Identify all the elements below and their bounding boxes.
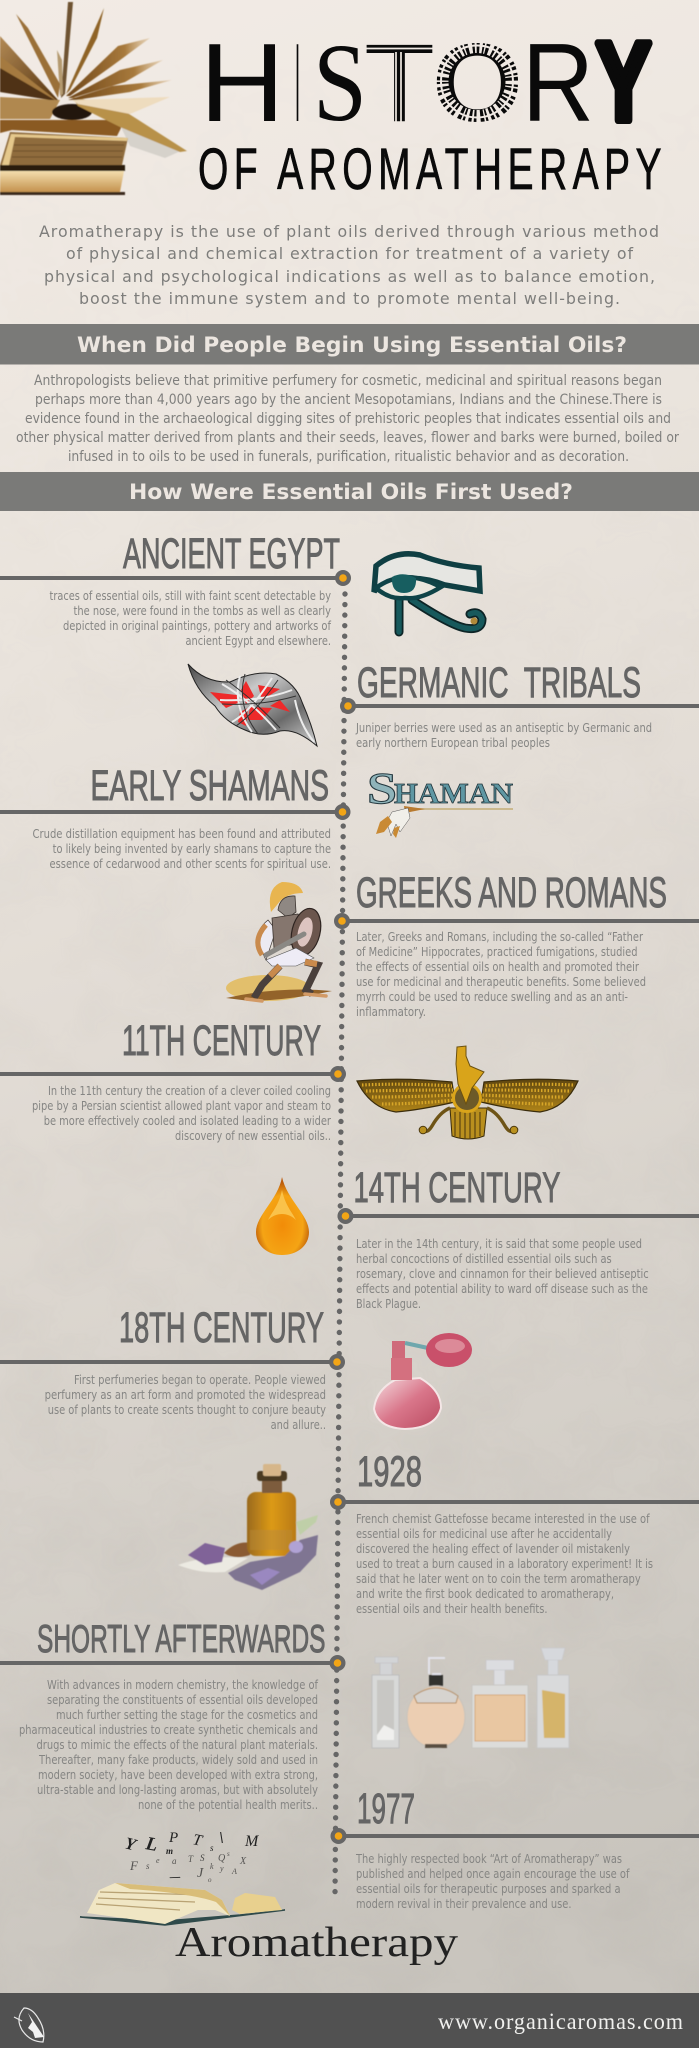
entry: greeks and romans: myrrh could be used to reduce swelling and as an anti- — [356, 990, 628, 1004]
footer url: www.organicaromas.com — [438, 2009, 684, 2034]
entry: 18th century — [0, 1304, 345, 1432]
entry: 1928: essential oils and their health benefits. — [356, 1602, 548, 1616]
icon: shaman logo: HAMAN — [394, 779, 513, 810]
entry: 1928: said that he later went on to coin the term aromatherapy — [356, 1572, 641, 1586]
entry: 1928: 1928 — [357, 1448, 422, 1496]
entry: 11th century: 11TH CENTURY — [122, 1017, 321, 1065]
icon: open book with floating letters: Q — [218, 1853, 226, 1864]
entry: 18th century: 18TH CENTURY — [119, 1304, 324, 1352]
entry: 1977: 1977 — [357, 1785, 415, 1833]
entry: greeks and romans: inflammatory. — [356, 1005, 426, 1019]
footer band — [0, 1993, 699, 2048]
intro paragraph: boost the immune system and to promote mental well-being. — [79, 289, 620, 308]
title: HISTORY: H — [200, 21, 285, 145]
intro paragraph: physical and psychological indications as well as to balance emotion, — [44, 267, 655, 286]
entry: 1928: discovered the healing effect of lavender oil mistakenly — [356, 1542, 630, 1556]
icon: shaman logo — [367, 764, 513, 838]
icon: oil bottle with lavender — [178, 1464, 318, 1590]
intro paragraph: Aromatherapy is the use of plant oils derived through various method — [39, 222, 659, 241]
entry: early shamans: essence of cedarwood and other scents for spiritual use. — [50, 857, 331, 871]
entry: 18th century: and allure.. — [271, 1418, 326, 1432]
icon: open book with floating letters: F — [129, 1858, 139, 1873]
title: HISTORY: Y — [596, 20, 651, 144]
dotted timeline spine — [335, 594, 345, 1896]
icon: open book with floating letters: L — [143, 1833, 159, 1856]
icon: open book with floating letters: P — [168, 1830, 178, 1846]
entry: ancient egypt: ancient Egypt and elsewhere. — [186, 634, 331, 648]
entry: ancient egypt: ANCIENT EGYPT — [123, 530, 340, 578]
entry: shortly afterwards: With advances in modern chemistry, the knowledge of — [47, 1678, 319, 1692]
icon: open book with floating letters: \ — [219, 1828, 224, 1847]
icon: oil drop — [256, 1177, 309, 1255]
icon: open book with floating letters: J — [197, 1866, 204, 1881]
entry: 11th century: pipe by a Persian scientist allowed plant vapor and steam to — [32, 1099, 331, 1113]
icon: roman warrior — [226, 882, 332, 1001]
icon: eye of horus — [374, 554, 482, 632]
icon: open book with floating letters: S — [200, 1853, 205, 1863]
icon: butterfly logo — [14, 2008, 44, 2042]
section banner: how were oils first used: How Were Essential Oils First Used? — [129, 480, 573, 504]
section banner: how were oils first used — [0, 472, 699, 511]
entry: 14th century: Black Plague. — [356, 1297, 421, 1311]
icon: open book with floating letters: s — [146, 1861, 150, 1871]
entry: 1977: The highly respected book “Art of Aromatherapy” was — [355, 1852, 622, 1866]
intro paragraph: of physical and chemical extraction for treatment of a variety of — [66, 244, 633, 263]
label: aromatherapy wordmark: Aromatherapy — [175, 1920, 458, 1966]
section banner: when did people begin: When Did People Begin Using Essential Oils? — [77, 333, 627, 357]
icon: open book with floating letters: s — [227, 1850, 230, 1858]
entry: 1928: and write the first book dedicated to aromatherapy, — [356, 1587, 614, 1601]
entry: 14th century: 14TH CENTURY — [354, 1164, 560, 1212]
entry: greeks and romans: the effects of essential oils on health and promoted their — [356, 960, 639, 974]
icon: open book with floating letters — [80, 1828, 285, 1925]
entry: shortly afterwards: Thereafter, many fake products, widely sold and used in — [38, 1753, 318, 1767]
entry: shortly afterwards: separating the constituents of essential oils developed — [47, 1693, 318, 1707]
icon: open book with floating letters: e — [156, 1856, 160, 1865]
title: HISTORY: R — [522, 21, 594, 145]
icon: open book with floating letters: o — [208, 1876, 212, 1884]
entry: early shamans: Crude distillation equipment has been found and attributed — [32, 827, 331, 841]
entry: 1977 — [330, 1785, 699, 1911]
icon: open book with floating letters: k — [210, 1862, 214, 1871]
entry: 18th century: use of plants to create scents thought to conjure beauty — [48, 1403, 326, 1417]
icon: open book with floating letters: y — [219, 1864, 224, 1873]
entry: 14th century: herbal concoctions of distilled essential oils such as — [356, 1252, 612, 1266]
icon: open book with floating letters: Y — [123, 1834, 139, 1855]
origins paragraph — [16, 373, 679, 465]
entry: ancient egypt — [0, 530, 351, 648]
entry: 14th century — [338, 1164, 699, 1311]
entry: ancient egypt: depicted in original paintings, pottery and artworks of — [63, 619, 332, 633]
entry: 11th century — [0, 1017, 346, 1143]
title: HISTORY: T — [364, 21, 435, 145]
entry: greeks and romans — [334, 869, 699, 1019]
entry: germanic tribals — [340, 659, 699, 750]
icon: open book with floating letters: X — [239, 1856, 247, 1867]
icon: celtic tribal knot — [188, 664, 317, 746]
entry: shortly afterwards — [0, 1618, 346, 1812]
entry: greeks and romans: Later, Greeks and Romans, including the so-called “Father — [356, 930, 643, 944]
intro paragraph — [39, 222, 659, 308]
entry: early shamans: to likely being invented by early shamans to capture the — [53, 842, 331, 856]
entry: greeks and romans: use for medicinal and therapeutic benefits. Some believed — [356, 975, 646, 989]
entry: shortly afterwards: none of the potential health merits.. — [138, 1798, 318, 1812]
entry: 1928: essential oils for medicinal use after he accidentally — [356, 1527, 612, 1541]
entry: shortly afterwards: much further setting the stage for the cosmetics and — [56, 1708, 318, 1722]
entry: early shamans: EARLY SHAMANS — [90, 762, 329, 810]
entry: 11th century: discovery of new essential oils.. — [175, 1129, 331, 1143]
entry: shortly afterwards: pharmaceutical industries to create synthetic chemicals and — [19, 1723, 318, 1737]
entry: ancient egypt: traces of essential oils, still with faint scent detectable by — [50, 589, 331, 603]
icon: open book with floating letters: T — [191, 1831, 204, 1850]
entry: shortly afterwards: drugs to mimic the effects of the natural plant materials. — [36, 1738, 318, 1752]
entry: 1977: modern revival in their prevalence and use. — [356, 1897, 572, 1911]
icon: four perfume bottles — [372, 1648, 569, 1748]
icon: open book with floating letters: / — [166, 1872, 182, 1884]
entry: 1977: essential oils for therapeutic purposes and sparked a — [356, 1882, 621, 1896]
entry: ancient egypt: the nose, were found in the tombs as well as clearly — [74, 604, 331, 618]
entry: 11th century: be more effectively cooled and isolated leading to a wider — [44, 1114, 331, 1128]
section banner: when did people begin — [0, 324, 699, 364]
title: HISTORY: S — [313, 22, 367, 145]
icon: stack of old books — [0, 2, 187, 195]
title: HISTORY: O — [432, 21, 523, 145]
icon: open book with floating letters: T — [188, 1854, 194, 1864]
entry: greeks and romans: of Medicine” Hippocrates, practiced fumigations, studied — [356, 945, 638, 959]
icon: open book with floating letters: s — [210, 1843, 214, 1853]
icon: open book with floating letters: M — [244, 1833, 260, 1850]
icon: faravahar winged emblem — [357, 1046, 578, 1139]
entry: 1928 — [330, 1448, 699, 1616]
entry: 1977: published and helped once again encourage the use of — [356, 1867, 630, 1881]
icon: open book with floating letters: a — [172, 1856, 177, 1866]
icon: open book with floating letters: m — [166, 1846, 173, 1856]
entry: 18th century: perfumery as an art form and promoted the widespread — [45, 1388, 326, 1402]
icon: open book with floating letters: A — [231, 1867, 237, 1876]
entry: germanic tribals: early northern European tribal peoples — [356, 736, 550, 750]
icon: perfume atomizer — [374, 1333, 472, 1429]
title: HISTORY — [200, 20, 651, 145]
entry: 11th century: In the 11th century the creation of a clever coiled cooling — [48, 1084, 331, 1098]
entry: early shamans — [0, 762, 350, 871]
origins paragraph: infused in to oils to be used in funerals, purification, ritualistic behavior and as decoration. — [68, 449, 629, 465]
entry: 14th century: Later in the 14th century, it is said that some people used — [356, 1237, 642, 1251]
entry: 18th century: First perfumeries began to operate. People viewed — [74, 1373, 326, 1387]
entry: shortly afterwards: ultra-stable and long-lasting aromas, but with absolutely — [37, 1783, 318, 1797]
entry: shortly afterwards: SHORTLY AFTERWARDS — [37, 1618, 326, 1661]
icon: shaman logo: S — [367, 764, 397, 813]
entry: shortly afterwards: modern society, have been developed with extra strong, — [38, 1768, 318, 1782]
title: HISTORY: I — [295, 21, 300, 145]
